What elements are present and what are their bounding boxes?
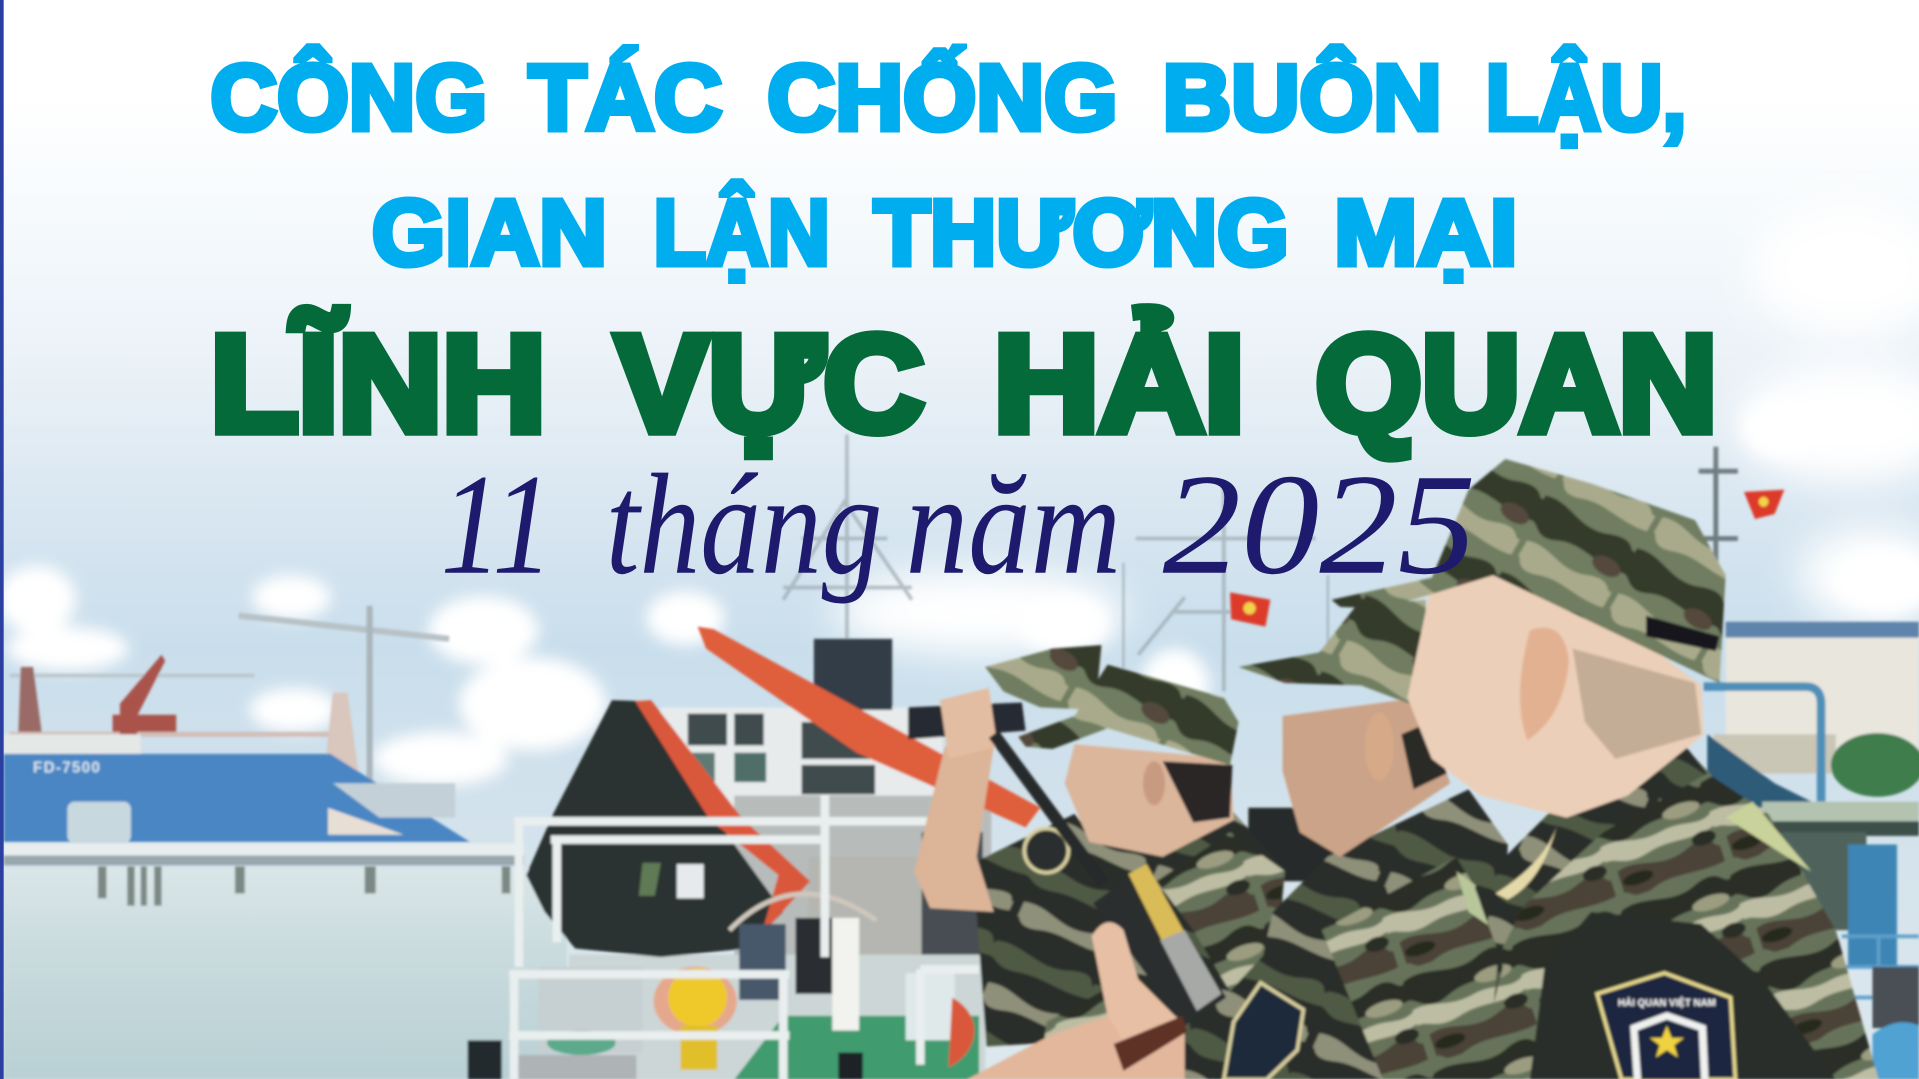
cap bbox=[1018, 665, 1239, 765]
chest badge bbox=[1024, 829, 1068, 873]
dark ship section behind soldiers bbox=[1248, 808, 1334, 881]
cap bbox=[985, 645, 1101, 710]
subtitle: period: tháng bbox=[606, 445, 882, 605]
shipyard cranes red bbox=[18, 655, 360, 783]
floating dock FD-7500: FD-7500 bbox=[33, 759, 101, 776]
photo scene bbox=[4, 434, 1919, 1079]
title line 3: QUAN bbox=[1316, 308, 1717, 461]
title line 1: TÁC bbox=[529, 46, 722, 150]
soldier 2 bbox=[1018, 665, 1285, 1079]
tower crane bbox=[10, 606, 449, 783]
hand bbox=[1092, 922, 1185, 1055]
watch band bbox=[1114, 1016, 1187, 1071]
title line 3: HẢI bbox=[994, 307, 1245, 461]
shoulder camo bbox=[1157, 832, 1285, 991]
binoculars bbox=[908, 703, 1026, 739]
sleeve badge bbox=[1224, 983, 1303, 1079]
right mast and flag bbox=[1699, 447, 1784, 636]
face and neck bbox=[1283, 698, 1450, 857]
water bbox=[4, 869, 567, 1079]
shoulder patch bbox=[1726, 802, 1811, 871]
radio yellow strip bbox=[1128, 864, 1185, 942]
chest camo bbox=[1322, 857, 1500, 1079]
orange crane arm bbox=[698, 627, 1040, 827]
deck equipment and life ring bbox=[468, 967, 974, 1079]
face and neck bbox=[1065, 744, 1234, 857]
hanging laundry bbox=[729, 894, 876, 1031]
subtitle: period: 2025 bbox=[1163, 445, 1476, 605]
blue boat structure bbox=[1704, 687, 1919, 1079]
subtitle: period: 11 bbox=[441, 445, 553, 605]
title line 3 bbox=[211, 307, 1717, 461]
title line 2: MẠI bbox=[1334, 180, 1518, 284]
arm bbox=[967, 1016, 1185, 1079]
soldier 1 with binoculars bbox=[908, 645, 1108, 1046]
title line 2: LẬN bbox=[654, 180, 830, 284]
collar patch bbox=[1456, 871, 1496, 930]
cap crown bbox=[1332, 459, 1726, 683]
sleeve bbox=[1040, 991, 1163, 1079]
antenna bbox=[994, 734, 1104, 884]
ear bbox=[1520, 628, 1569, 740]
mid-ship flag bbox=[1230, 592, 1270, 627]
background ship masts bbox=[783, 434, 1328, 692]
sleeve badge: customs shield: HẢI QUAN VIỆT NAM bbox=[1618, 997, 1716, 1009]
tree bbox=[1831, 733, 1919, 797]
soldier 3 bbox=[1212, 600, 1508, 1079]
hair bbox=[1401, 722, 1447, 789]
background building bbox=[1713, 622, 1919, 774]
title line 1: LẬU, bbox=[1486, 46, 1686, 150]
ear bbox=[1143, 761, 1165, 805]
collar pin bbox=[1496, 826, 1557, 900]
face and neck bbox=[1407, 569, 1704, 818]
left border stripe bbox=[0, 0, 4, 1079]
title line 3: VỰC bbox=[616, 308, 924, 461]
soldier 4 foreground bbox=[1332, 459, 1879, 1079]
torso bbox=[1475, 732, 1879, 1079]
covered lifeboat bbox=[526, 700, 810, 957]
haze over upper photo bbox=[0, 110, 1919, 477]
clouds bbox=[0, 202, 1919, 786]
hair bbox=[1163, 761, 1232, 822]
shaved hair bbox=[1573, 649, 1701, 759]
title line 2: GIAN bbox=[372, 180, 607, 284]
torso bbox=[1212, 789, 1508, 1079]
radio body bbox=[1093, 867, 1226, 1026]
subtitle: period: năm bbox=[906, 445, 1121, 605]
radio keypad bbox=[1160, 930, 1221, 1011]
body bbox=[973, 814, 1108, 1046]
cap bbox=[1239, 600, 1426, 710]
title line 3: LĨNH bbox=[211, 308, 546, 461]
white railings bbox=[509, 796, 979, 1079]
upper sleeve bbox=[1530, 912, 1836, 1079]
title line 1: CHỐNG bbox=[767, 46, 1117, 150]
floating dock FD-7500 bbox=[4, 734, 470, 843]
arm bbox=[914, 747, 994, 912]
title line 2: THƯƠNG bbox=[874, 180, 1289, 284]
torso bbox=[1040, 802, 1285, 1079]
sleeve badge: customs shield bbox=[1597, 973, 1735, 1079]
patrol boat superstructure bbox=[569, 639, 991, 1079]
jetty bbox=[4, 843, 524, 906]
radio and hand bbox=[967, 734, 1226, 1079]
title line 1 bbox=[211, 46, 1686, 150]
title line 1: BUÔN bbox=[1163, 46, 1442, 150]
subtitle: period bbox=[441, 445, 1476, 605]
collar bbox=[1475, 732, 1707, 955]
hand bbox=[940, 688, 997, 759]
title line 1: CÔNG bbox=[211, 46, 487, 150]
cap strap bbox=[1646, 616, 1720, 651]
title line 2 bbox=[372, 180, 1518, 284]
ear bbox=[1365, 712, 1394, 781]
